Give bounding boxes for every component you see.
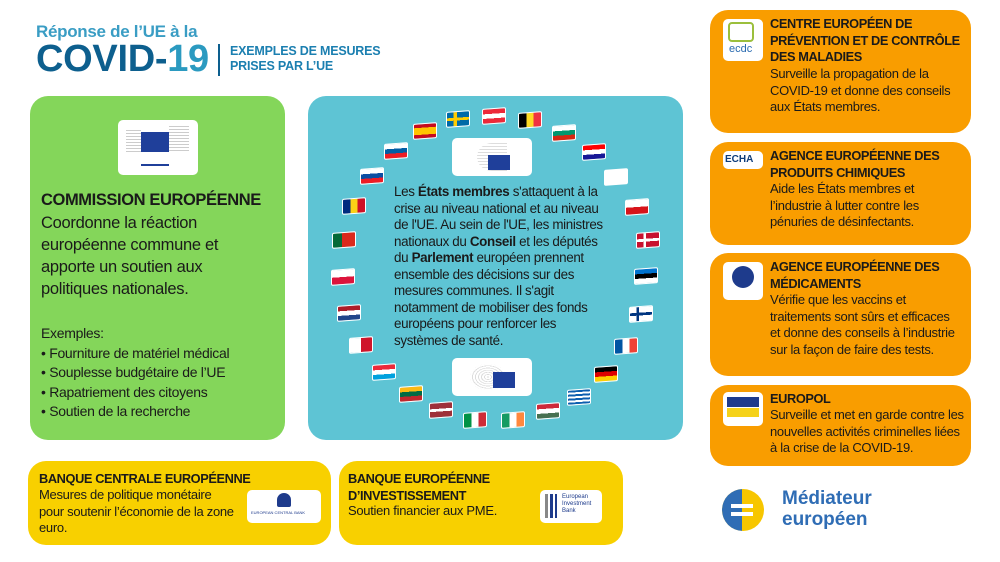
subtitle: Réponse de l'UE à la: Réponse de l’UE à la — [36, 22, 197, 41]
panel: EMA: Vérifie que les vaccins et traitements sont sûrs et efficaces et donne des conseils à l’industrie sur la façon de faire des tests. — [770, 292, 955, 356]
panel: Europol: Surveille et met en garde contre les nouvelles activités criminelles liées à la crise de la COVID-19. — [770, 407, 964, 455]
icon: eib logo: Investment — [562, 501, 591, 507]
heading: COVID-19: COVID-19 — [36, 38, 209, 80]
icon: ecb logo — [247, 490, 321, 523]
flags circle — [331, 107, 660, 429]
panel: ECHA: AGENCE EUROPÉENNE DES PRODUITS CHIMIQUES — [770, 148, 939, 180]
panel: ECDC: CENTRE EUROPÉEN DE PRÉVENTION ET DE CONTRÔLE DES MALADIES — [770, 16, 960, 64]
panel: BCE — [28, 461, 331, 545]
text: description: Coordonne la réaction européenne commune et apporte un soutien aux politiques nationales. — [41, 214, 218, 298]
icon: echa logo: ECHA — [725, 154, 753, 165]
panel: ECHA: Aide les États membres et l’industrie à lutter contre les pénuries de désinfectants. — [770, 181, 919, 229]
panel: EMA: AGENCE EUROPÉENNE DES MÉDICAMENTS — [770, 259, 939, 290]
list: examples: • Soutien de la recherche — [41, 403, 190, 419]
icon: europol logo — [723, 392, 763, 426]
title block — [36, 22, 380, 80]
panel: BCE: BANQUE CENTRALE EUROPÉENNE — [39, 471, 250, 486]
panel: EMA — [710, 253, 971, 376]
list: examples: • Souplesse budgétaire de l’UE — [41, 364, 225, 380]
icon: commission logo — [118, 120, 198, 175]
icon: eib logo: European — [562, 494, 588, 500]
panel: Commission européenne — [30, 96, 285, 440]
panel: États membres — [308, 96, 683, 440]
list: examples — [41, 325, 229, 419]
icon: echa logo — [723, 151, 763, 169]
panel: BEI: BANQUE EUROPÉENNE D’INVESTISSEMENT — [348, 471, 490, 502]
panel: Europol: EUROPOL — [770, 391, 830, 406]
icon: eib logo: Bank — [562, 508, 576, 514]
panel: BCE: Mesures de politique monétaire pour soutenir l’économie de la zone euro. — [39, 487, 234, 535]
logo: Médiateur européen — [722, 488, 872, 531]
panel: Europol — [710, 385, 971, 466]
icon: ecdc logo — [723, 19, 763, 61]
logo: Médiateur européen: Médiateur — [782, 488, 872, 509]
panel: ECDC: Surveille la propagation de la COVID-19 et donne des conseils aux États membres. — [770, 66, 950, 114]
text: member states: Les États membres s'attaquent à la crise au niveau national et au niveau de l'UE. Au sein de l'UE, les ministres nationaux du Conseil et les députés du Parlement européen prennent ensemble des décisions sur des mesures communes. Il s'agit notamment de mobiliser des fonds européens pour renforcer les systèmes de santé. — [394, 184, 603, 348]
caption: EXEMPLES DE MESURES — [230, 44, 380, 58]
caption — [218, 44, 380, 76]
icon: ombudsman — [722, 489, 764, 531]
list: examples: Exemples: — [41, 325, 104, 341]
list: examples: • Rapatriement des citoyens — [41, 384, 207, 400]
panel: ECDC — [710, 10, 971, 133]
icon: ecdc logo: ecdc — [729, 43, 752, 55]
logo: Médiateur européen: européen — [782, 509, 868, 530]
list: examples: • Fourniture de matériel médical — [41, 344, 229, 360]
caption: PRISES PAR L’UE — [230, 59, 333, 73]
heading: COMMISSION EUROPÉENNE — [41, 191, 261, 209]
panel: BEI — [339, 461, 623, 545]
icon: ema logo — [723, 262, 763, 300]
icon: parliament logo — [452, 358, 532, 396]
icon: eib logo — [540, 490, 602, 523]
icon: council logo — [452, 138, 532, 176]
panel: ECHA — [710, 142, 971, 245]
icon: ecb logo: EUROPEAN CENTRAL BANK — [251, 510, 305, 515]
panel: BEI: Soutien financier aux PME. — [348, 503, 497, 518]
